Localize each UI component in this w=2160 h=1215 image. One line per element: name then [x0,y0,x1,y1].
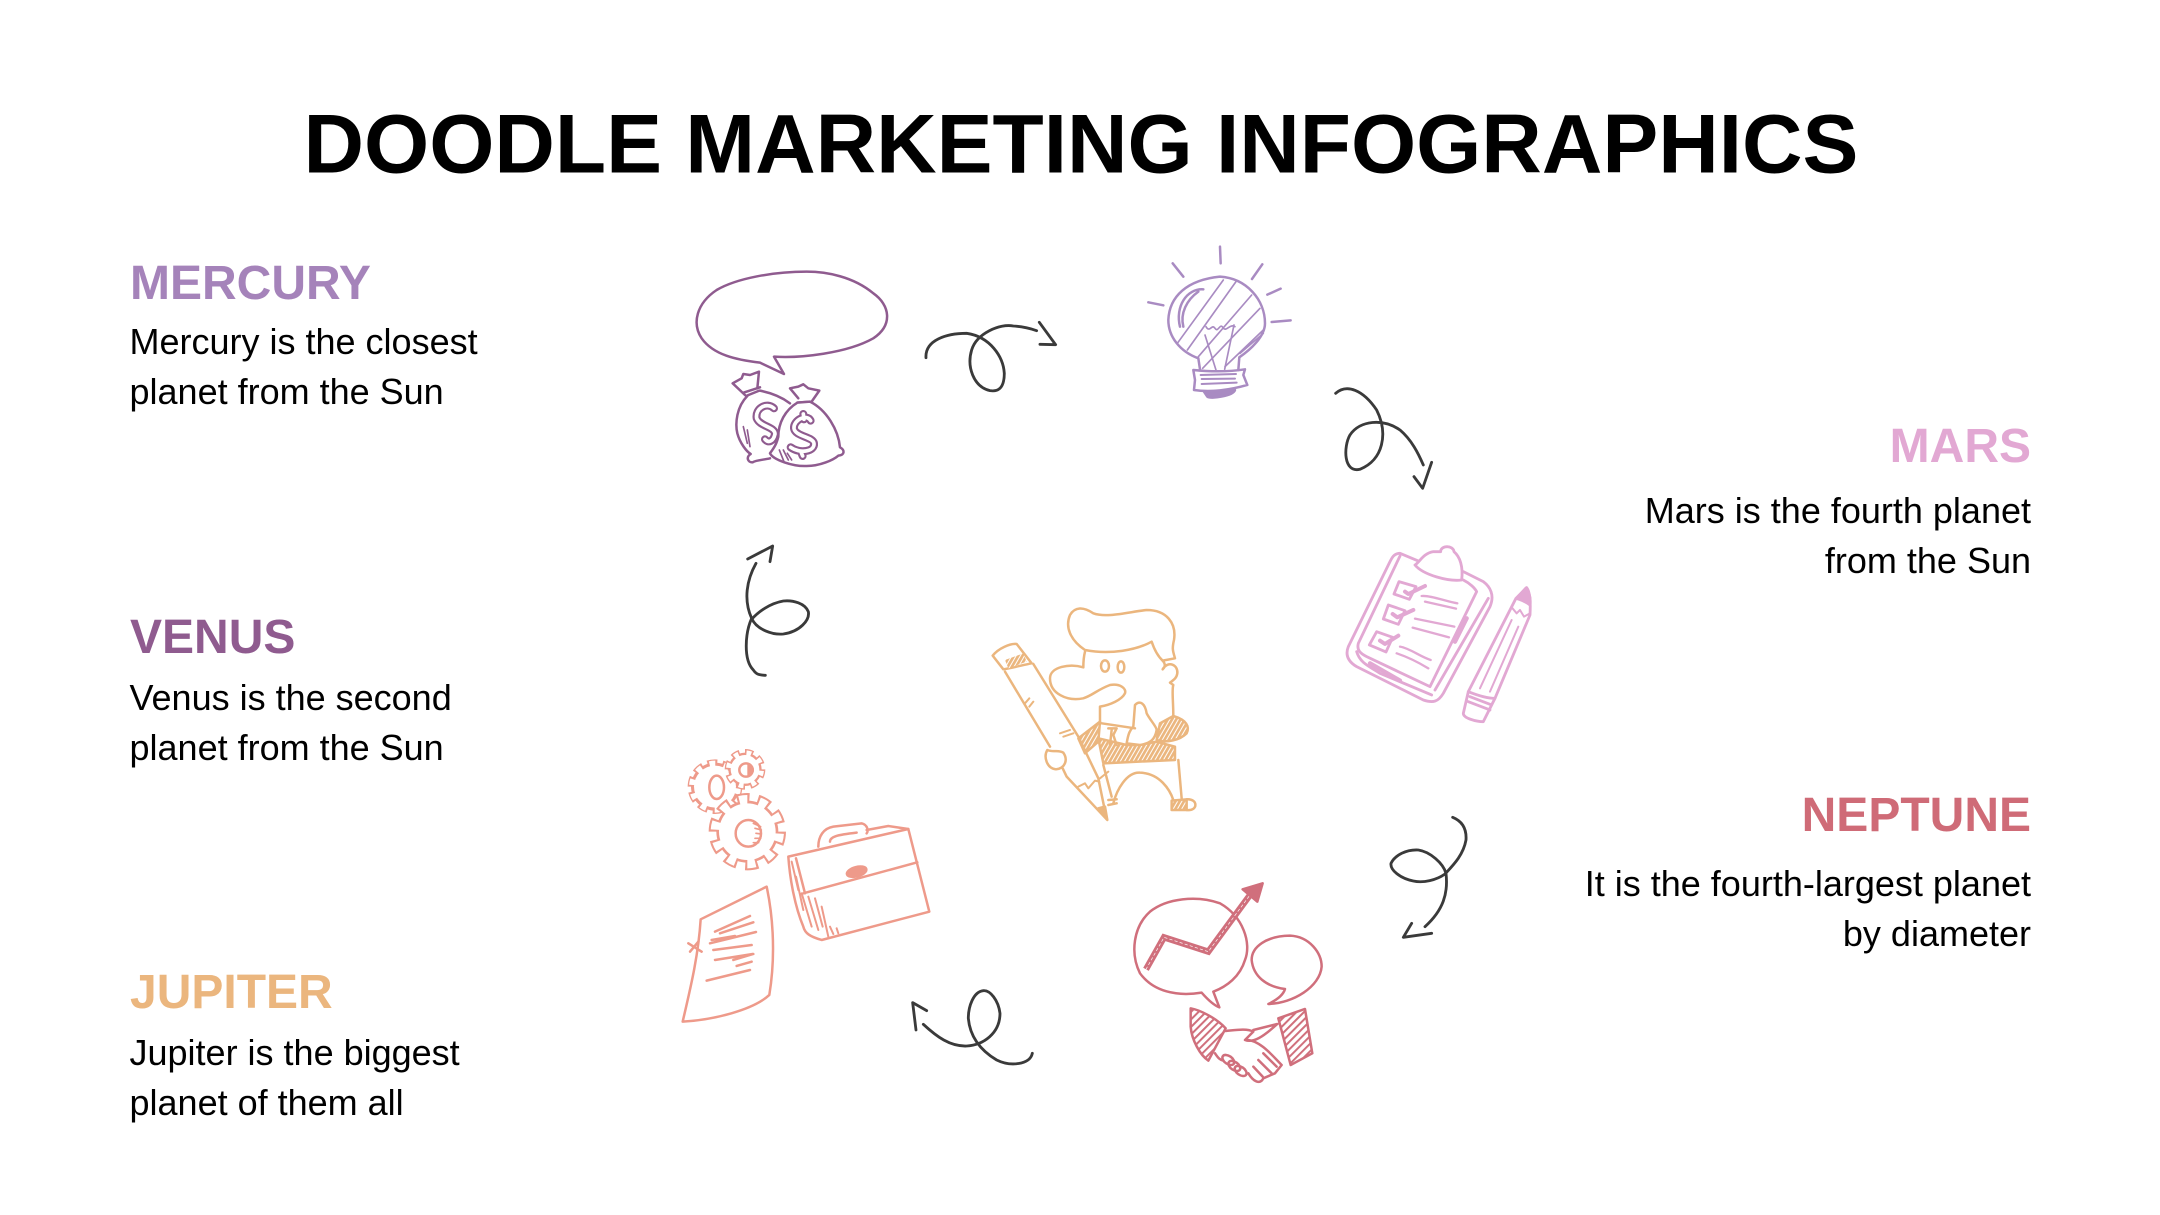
text block: Jupiter: Jupiter is the biggest [130,1032,460,1073]
title: DOODLE MARKETING INFOGRAPHICS [304,96,1858,190]
text block: Jupiter: planet of them all [130,1082,404,1123]
text block: Venus: planet from the Sun [130,727,444,768]
arrow: top right to clipboard [1336,389,1432,488]
arrow: top left to top right [926,322,1056,391]
text block: Neptune: NEPTUNE [1802,789,2031,842]
text block: Mercury [130,257,478,412]
briefcase [788,823,929,940]
text block: Jupiter: JUPITER [130,966,333,1019]
text block: Mercury: planet from the Sun [130,371,444,412]
text block: Mars [1645,420,2031,581]
text block: Neptune: by diameter [1843,913,2031,954]
icon: character holding pencil [993,609,1195,820]
arrow: right side downward [1391,817,1466,937]
arrow: bottom middle to gears [913,991,1032,1064]
text block: Mars: from the Sun [1825,540,2031,581]
icon: light bulb [1148,247,1291,398]
gear: large [713,797,782,866]
icon: speech bubble and money bags [697,272,887,466]
text block: Mars: Mars is the fourth planet [1645,490,2031,531]
arrow: left side upward [746,546,809,675]
text block: Neptune: It is the fourth-largest planet [1585,863,2031,904]
text block: Venus: Venus is the second [130,677,452,718]
text block: Neptune [1585,789,2031,954]
text block: Mercury: Mercury is the closest [130,321,478,362]
document [683,887,773,1022]
text block: Venus: VENUS [130,611,295,664]
gear: left [691,763,739,811]
icon: gears, briefcase and document [683,752,929,1022]
text block: Mars: MARS [1890,420,2031,473]
text block: Jupiter [130,966,460,1123]
text block: Mercury: MERCURY [130,257,371,310]
icon: chart bubbles and handshake [1134,883,1322,1082]
icon: clipboard and pencil [1347,547,1530,722]
gear: small top [728,752,762,787]
text block: Venus [130,611,452,768]
